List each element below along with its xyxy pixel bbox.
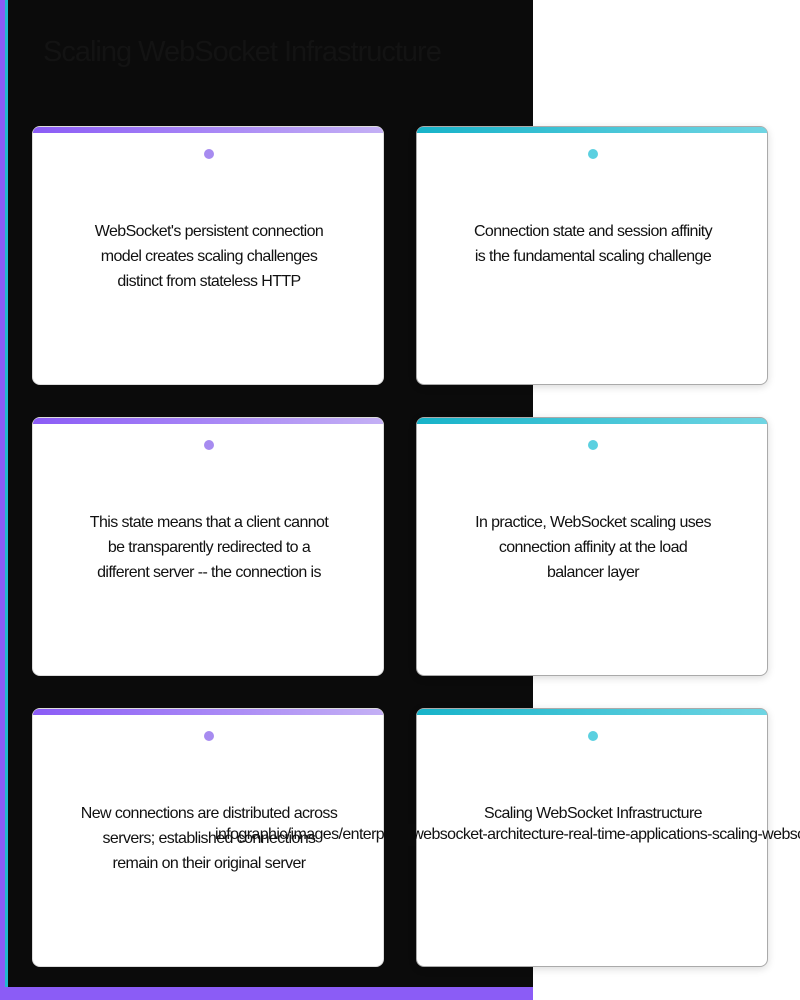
text block: remain on their original server <box>112 855 306 872</box>
text block <box>94 223 323 290</box>
text block: be transparently redirected to a <box>108 539 310 556</box>
text block: model creates scaling challenges <box>101 248 317 265</box>
text block: WebSocket's persistent connection <box>95 223 323 240</box>
text block <box>90 514 329 581</box>
panel: card 2 <box>416 126 768 385</box>
icon: dot <box>588 440 598 450</box>
panel: card 6 <box>416 708 768 967</box>
icon: dot <box>204 731 214 741</box>
panel: card 3 <box>32 417 384 676</box>
icon: dot <box>204 149 214 159</box>
panel: card 4 <box>416 417 768 676</box>
title: Scaling WebSocket Infrastructure <box>43 36 441 68</box>
text block: This state means that a client cannot <box>90 514 328 531</box>
icon: dot <box>588 149 598 159</box>
text block: distinct from stateless HTTP <box>117 273 301 290</box>
icon: dot <box>588 731 598 741</box>
text block <box>81 805 338 872</box>
text block: New connections are distributed across <box>81 805 337 822</box>
icon: dot <box>204 440 214 450</box>
text block: Connection state and session affinity <box>474 223 712 240</box>
text block: balancer layer <box>547 564 639 581</box>
text block: servers; established connections <box>103 830 315 847</box>
panel: card 5 <box>32 708 384 967</box>
text block: connection affinity at the load <box>499 539 687 556</box>
text block: is the fundamental scaling challenge <box>475 248 711 265</box>
text block: In practice, WebSocket scaling uses <box>475 514 711 531</box>
text block <box>475 514 711 581</box>
panel: card 1 <box>32 126 384 385</box>
text block: different server -- the connection is <box>97 564 321 581</box>
text block <box>474 223 713 265</box>
text block: Scaling WebSocket Infrastructure <box>484 805 702 822</box>
